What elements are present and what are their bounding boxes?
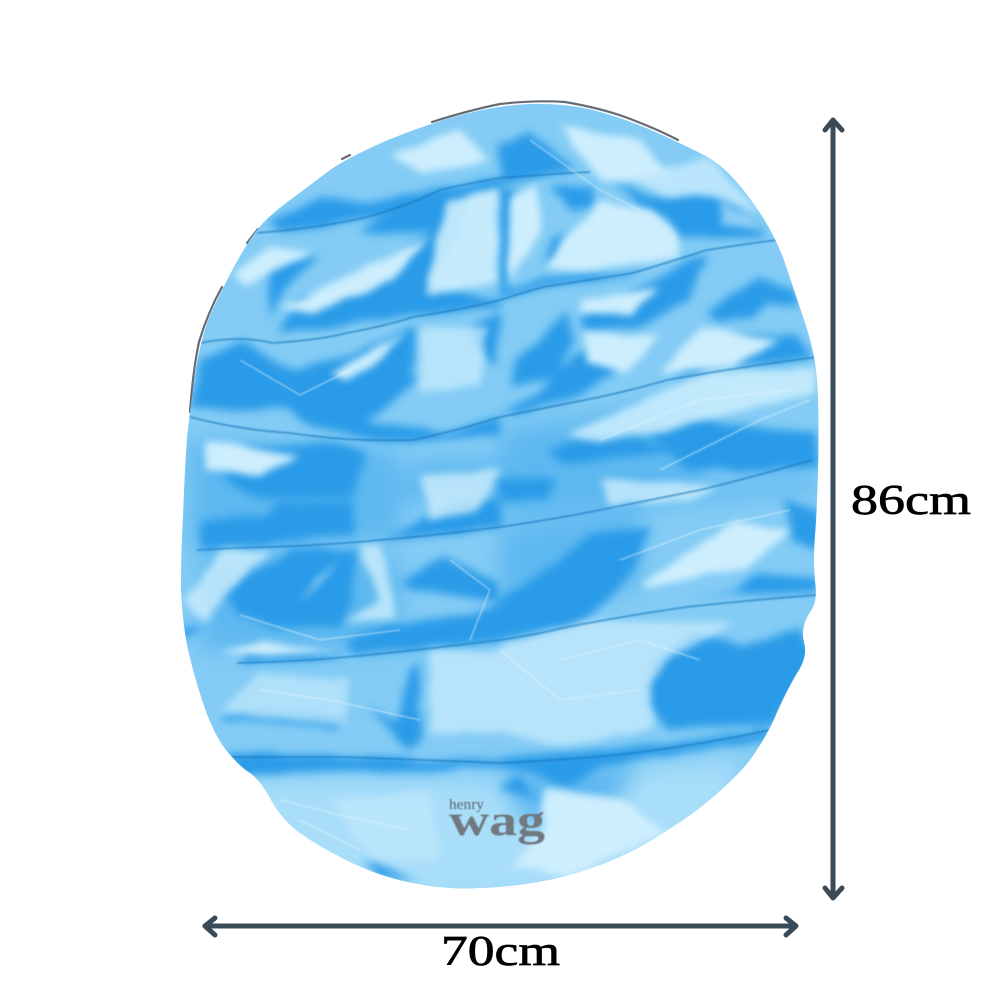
height label: 86cm [851,478,971,524]
logo word wag: wag [449,796,545,845]
horizontal arrow: width [205,918,796,935]
dark underside edge [190,101,678,412]
brand logo [449,796,545,845]
bright highlights [183,125,817,877]
logo word henry: henry [449,797,485,813]
dog bed [170,90,830,900]
mid-tone shading [190,400,817,830]
fabric base [170,90,830,900]
wrinkle lines [240,140,810,850]
quilt seams [190,172,817,763]
lower pale panel [220,760,740,900]
width label: 70cm [441,929,560,975]
bed fabric [170,90,830,900]
dark fold shadows [180,133,820,880]
vertical arrow: height [825,120,842,898]
